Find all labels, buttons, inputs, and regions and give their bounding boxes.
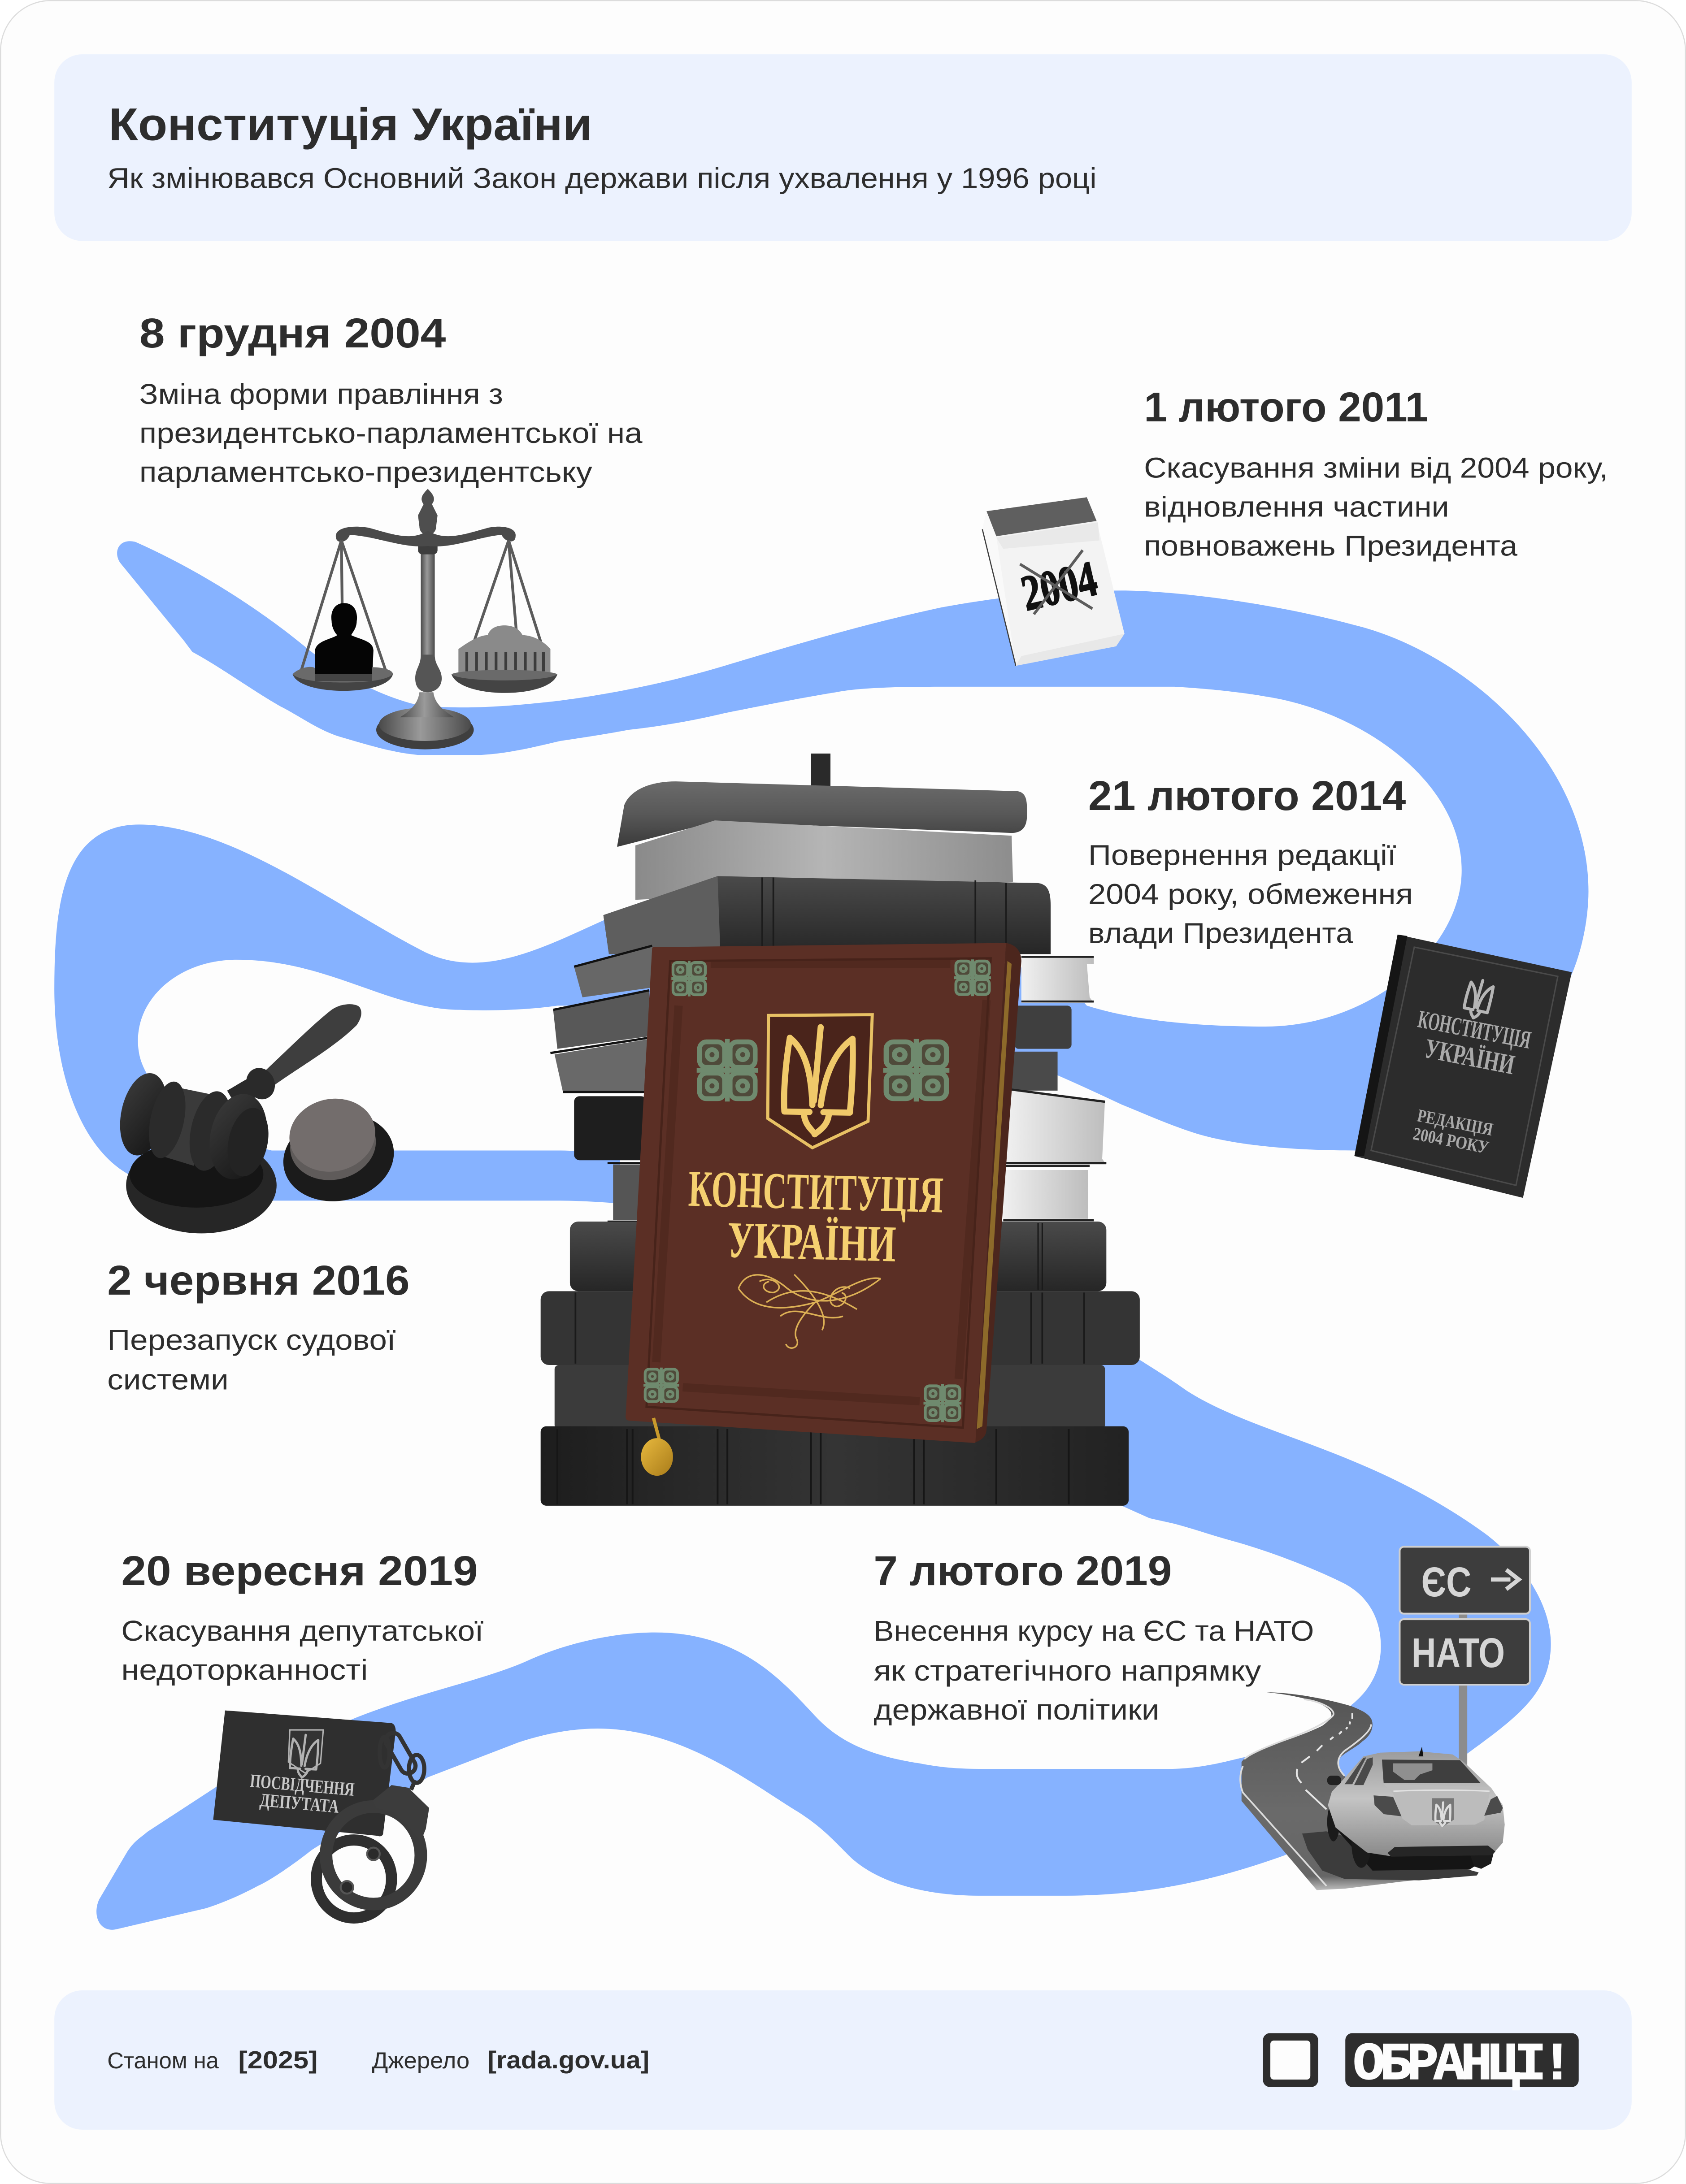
description line 3: влади Президента: [1088, 918, 1353, 949]
medal: [641, 1418, 673, 1476]
corner ornament BL: [643, 1368, 679, 1403]
book title line 1: КОНСТИТУЦІЯ: [688, 1160, 944, 1223]
calendar pages: [982, 511, 1125, 666]
tail light left: [1373, 1795, 1401, 1816]
cover border: [647, 958, 991, 1428]
inner frame: [1371, 947, 1558, 1185]
sign text ЄС: ЄС: [1421, 1559, 1471, 1605]
description line 2: системи: [107, 1364, 229, 1395]
status label: Станом на: [107, 2048, 219, 2073]
road markings: [1240, 1699, 1371, 1886]
sign: НАТО: [1399, 1619, 1530, 1685]
handcuff front ring: [326, 1807, 421, 1904]
description line 1: Скасування депутатської: [121, 1615, 484, 1647]
header panel: [54, 54, 1632, 241]
collar: [241, 1063, 280, 1104]
description line 2: недоторканності: [121, 1654, 368, 1686]
date 7 лютого 2019: 7 лютого 2019: [873, 1547, 1172, 1594]
description line 1: Внесення курсу на ЄС та НАТО: [873, 1615, 1314, 1647]
coat of arms shield: [768, 1015, 872, 1148]
book 5: [608, 1163, 1094, 1222]
torn paper strip: [996, 522, 1099, 549]
title: Конституція України: [109, 98, 592, 150]
description line 1: Перезапуск судової: [107, 1324, 396, 1356]
logo mark: [1263, 2033, 1318, 2087]
gavel head: [113, 1069, 274, 1185]
book text line 3: РЕДАКЦІЯ: [1416, 1105, 1495, 1140]
book 1: [541, 1426, 1129, 1506]
icon: gavel: [113, 1004, 402, 1233]
description line 2: як стратегічного напрямку: [873, 1655, 1261, 1687]
footer panel: [54, 1990, 1632, 2130]
source value: [rada.gov.ua]: [488, 2046, 649, 2074]
description line 3: повноважень Президента: [1144, 530, 1518, 562]
handle: [263, 1004, 361, 1085]
crossed out mark: [1020, 550, 1092, 614]
corner ornament TR: [954, 959, 991, 996]
tail light right: [1484, 1796, 1503, 1816]
book 12: [617, 781, 1027, 847]
right pan: [452, 670, 557, 693]
handcuff hinge studs: [341, 1848, 380, 1894]
corner ornament TL: [671, 961, 707, 997]
trunk crease: [1393, 1790, 1490, 1791]
ID text line 1: ПОСВІДЧЕННЯ: [249, 1771, 355, 1800]
date 8 грудня 2004: 8 грудня 2004: [139, 310, 446, 356]
car wheels: [1327, 1803, 1494, 1869]
side window rear: [1354, 1757, 1373, 1785]
icon: deputy ID and handcuffs: [213, 1711, 429, 1918]
book cover: [1354, 935, 1572, 1198]
book title line 2: УКРАЇНИ: [727, 1211, 897, 1273]
book 4: [570, 1222, 1106, 1291]
year 2004: 2004: [1016, 550, 1102, 622]
handcuff back ring: [316, 1840, 391, 1918]
calendar binding: [986, 497, 1097, 536]
rear window: [1382, 1759, 1481, 1783]
event 2011: text block: [1144, 384, 1608, 562]
mirror: [1327, 1776, 1341, 1785]
page edge: [1016, 634, 1125, 666]
event 2004: text block: [139, 310, 643, 488]
description line 2: 2004 року, обмеження: [1088, 879, 1413, 910]
car emblem: [1432, 1798, 1454, 1827]
description line 2: відновлення частини: [1144, 491, 1449, 523]
ID trident: [289, 1734, 319, 1778]
book text line 1: КОНСТИТУЦІЯ: [1416, 1005, 1533, 1054]
event 2014: text block: [1088, 772, 1413, 949]
flourish: [739, 1274, 881, 1348]
date 20 вересня 2019: 20 вересня 2019: [121, 1547, 478, 1594]
dark shadow under car: [1335, 1828, 1492, 1871]
book 2: [555, 1365, 1105, 1429]
rear shelf highlight: [1393, 1764, 1432, 1780]
calendar spine: [982, 511, 1016, 666]
subtitle: Як змінювався Основний Закон держави після ухвалення у 1996 році: [107, 162, 1097, 194]
trident: [783, 1027, 853, 1135]
description line 3: парламентсько-президентську: [139, 456, 592, 488]
silhouette of a person: [315, 603, 374, 682]
small trident: [1462, 978, 1494, 1021]
book 8: [550, 990, 1072, 1053]
constitution book: [626, 943, 1021, 1476]
book 11: [635, 820, 1013, 900]
chains: [301, 541, 545, 672]
road: [1242, 1692, 1477, 1890]
base of the scales: [376, 692, 474, 750]
side of cover: [973, 943, 1021, 1443]
side ornament right: [883, 1039, 949, 1101]
inner border: [656, 964, 986, 1401]
beam: [336, 527, 516, 546]
date 2 червня 2016: 2 червня 2016: [107, 1257, 410, 1304]
corner ornament BR: [923, 1384, 961, 1422]
description line 3: державної політики: [873, 1694, 1159, 1726]
handcuff chain: [380, 1730, 424, 1790]
book 9 pages and cover: [574, 946, 1094, 1003]
gold page edge: [977, 961, 1012, 1429]
deputy ID card: [213, 1711, 396, 1836]
book stack: [541, 754, 1140, 1506]
book 6: [574, 1089, 1106, 1165]
car shadow: [1302, 1831, 1479, 1881]
book spine: [1354, 935, 1408, 1156]
neck: [227, 1074, 268, 1107]
side window front: [1345, 1757, 1366, 1784]
date 1 лютого 2011: 1 лютого 2011: [1144, 384, 1428, 430]
logo wordmark: ОБРАНЦІ!: [1353, 2035, 1573, 2095]
description line 1: Скасування зміни від 2004 року,: [1144, 452, 1608, 484]
book 10: [604, 876, 1051, 954]
front cover: [626, 943, 1006, 1443]
spine edge line: [982, 529, 1016, 666]
icon: road with car and signs: [1240, 1547, 1530, 1890]
striking plate side: [283, 1102, 382, 1188]
icon: tear-off calendar 2004: [982, 497, 1125, 666]
book text line 2: УКРАЇНИ: [1422, 1033, 1517, 1080]
handcuff lock plate: [373, 1785, 429, 1842]
road lane dashes: [1297, 1713, 1352, 1809]
left pan: [293, 667, 393, 691]
description line 2: президентсько-парламентської на: [139, 417, 643, 449]
side ornament left: [697, 1039, 758, 1101]
sign pole: [1459, 1609, 1467, 1765]
icon: scales: [293, 489, 557, 750]
bookmark top: [811, 754, 830, 787]
book text line 4: 2004 РОКУ: [1412, 1123, 1490, 1158]
trunk: [1384, 1784, 1491, 1825]
ID shield: [288, 1730, 323, 1773]
striking plate: [275, 1104, 402, 1211]
description line 1: Зміна форми правління з: [139, 378, 503, 410]
event Sept 2019: text block: [121, 1547, 484, 1686]
book 7: [555, 1039, 1058, 1092]
car body: [1328, 1751, 1505, 1856]
sign text НАТО: НАТО: [1412, 1629, 1505, 1676]
column: [415, 489, 442, 692]
sound block: [126, 1137, 277, 1233]
event Feb 2019: text block: [873, 1547, 1314, 1726]
book 3: [541, 1291, 1140, 1365]
striking plate top: [282, 1091, 382, 1179]
ID text line 2: ДЕПУТАТА: [259, 1790, 340, 1817]
bumper strip: [1387, 1846, 1495, 1857]
parliament dome: [458, 625, 550, 674]
date 21 лютого 2014: 21 лютого 2014: [1088, 772, 1406, 819]
sign arrow: [1491, 1570, 1519, 1589]
description line 1: Повернення редакції: [1088, 840, 1396, 871]
icon: black constitution book edition 2004: [1354, 935, 1572, 1198]
event 2016: text block: [107, 1257, 410, 1395]
source label: Джерело: [372, 2048, 469, 2073]
timeline ribbon: [54, 541, 1588, 1930]
antenna: [1418, 1746, 1423, 1756]
status value: [2025]: [238, 2046, 317, 2074]
sign: ЄС: [1399, 1547, 1530, 1614]
